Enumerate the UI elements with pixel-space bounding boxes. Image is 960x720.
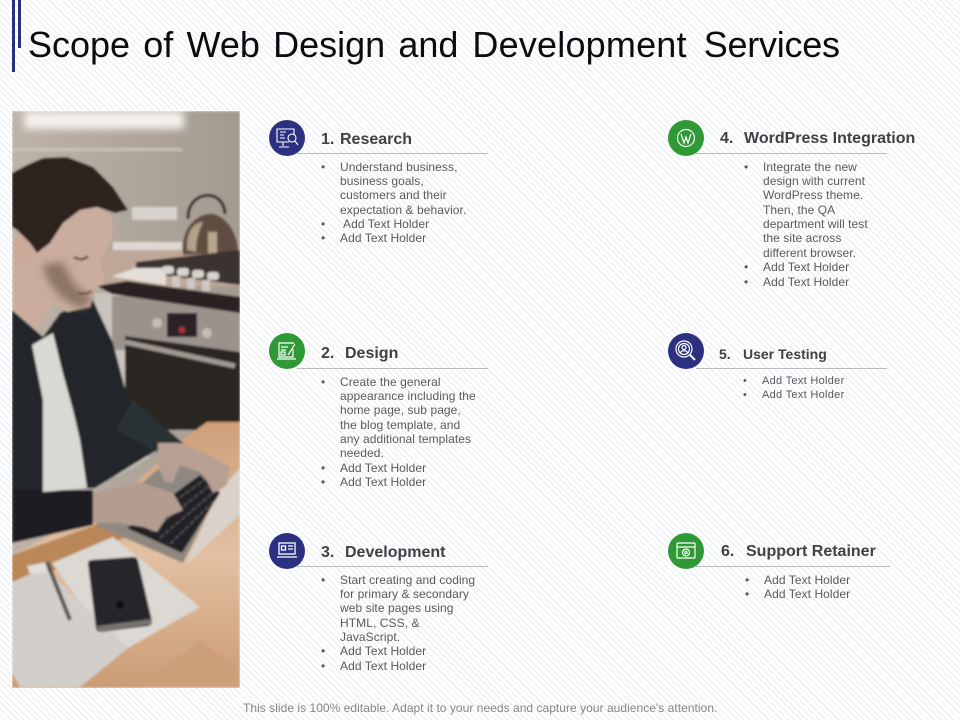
table [12,422,240,688]
bullet list: appearance including the [340,389,476,403]
bullet list: WordPress theme. [763,188,863,202]
bullet list: business goals, [340,174,424,188]
heading: 3. [321,544,334,561]
bullet list: Add Text Holder [764,587,850,601]
icon: wordpress [668,120,704,156]
bullet list: JavaScript. [340,630,400,644]
heading: 4. [720,130,733,147]
bullet list: Add Text Holder [762,389,845,401]
bullet list: Add Text Holder [340,644,426,658]
bullet list: Integrate the new [763,160,857,174]
panel: 3 development [269,533,488,673]
bullet list: department will test [763,217,868,231]
bullet list: the site across [763,231,841,245]
bullet list [322,160,466,245]
bullet list: Add Text Holder [343,217,429,231]
rule [297,566,488,567]
title accent bars [12,0,21,72]
heading: 5. [719,346,731,362]
laptop [185,468,240,565]
heading: 2. [321,345,334,362]
bullet list [322,572,475,673]
bullet list: home page, sub page, [340,403,461,417]
heading: WordPress Integration [744,130,915,147]
icon: user magnifier [668,333,704,369]
panel: 2 design [269,333,488,489]
rule [696,153,887,154]
head [12,205,112,330]
bullet list: Add Text Holder [340,461,426,475]
heading: Development [345,544,445,561]
t-shirt [32,333,87,492]
bullet list: Add Text Holder [764,572,850,586]
bullet list: Add Text Holder [340,659,426,673]
bullet list [322,374,476,489]
bullet list: for primary & secondary [340,587,469,601]
bullet list: Add Text Holder [762,375,845,387]
icon: research monitor [269,120,305,156]
heading: 6. [721,543,734,560]
kettle [188,195,225,219]
panel: 1 research [269,120,488,245]
bullet list: Understand business, [340,160,457,174]
icon: development laptop [269,533,305,569]
icon: design pencil [269,333,305,369]
bullet list: Then, the QA [763,203,835,217]
rule [696,566,890,567]
bullet list: Add Text Holder [340,475,426,489]
bullet list: web site pages using [340,601,453,615]
phone [88,557,152,632]
bullet list: any additional templates [340,432,471,446]
bullet list: Add Text Holder [340,231,426,245]
bullet list: customers and their [340,188,447,202]
heading [321,345,398,362]
rule [297,153,488,154]
footer note: This slide is 100% editable. Adapt it to your needs and capture your audience's attention. [243,701,717,715]
bullet list: Add Text Holder [763,260,849,274]
bullet list: Add Text Holder [763,275,849,289]
jacket [12,298,183,492]
bullet list: needed. [340,446,384,460]
bullet list: different browser. [763,246,856,260]
heading: 1. [321,131,334,148]
icon: support browser window [668,533,704,569]
bullet list [746,572,850,601]
bullet list: design with current [763,174,865,188]
bullet list: expectation & behavior. [340,203,466,217]
heading: Support Retainer [746,543,876,560]
panel: 4 wordpress integration [668,120,915,289]
bullet list: Create the general [340,374,441,388]
heading: User Testing [743,346,827,362]
photo: man typing on laptop in kitchen [12,111,240,688]
bullet list [744,160,868,289]
hands [157,443,230,493]
bullet list: HTML, CSS, & [340,616,420,630]
rule [696,368,887,369]
panel: 6 support retainer [668,533,890,601]
panel: 5 user testing [668,333,887,401]
bullet list: the blog template, and [340,418,460,432]
notebook [52,537,200,648]
bullet list: Start creating and coding [340,572,475,586]
bullet list [743,375,845,401]
heading: Research [340,131,412,148]
title: Scope of Web Design and Development Services [28,24,840,65]
heading: Design [345,345,398,362]
rule [297,368,488,369]
